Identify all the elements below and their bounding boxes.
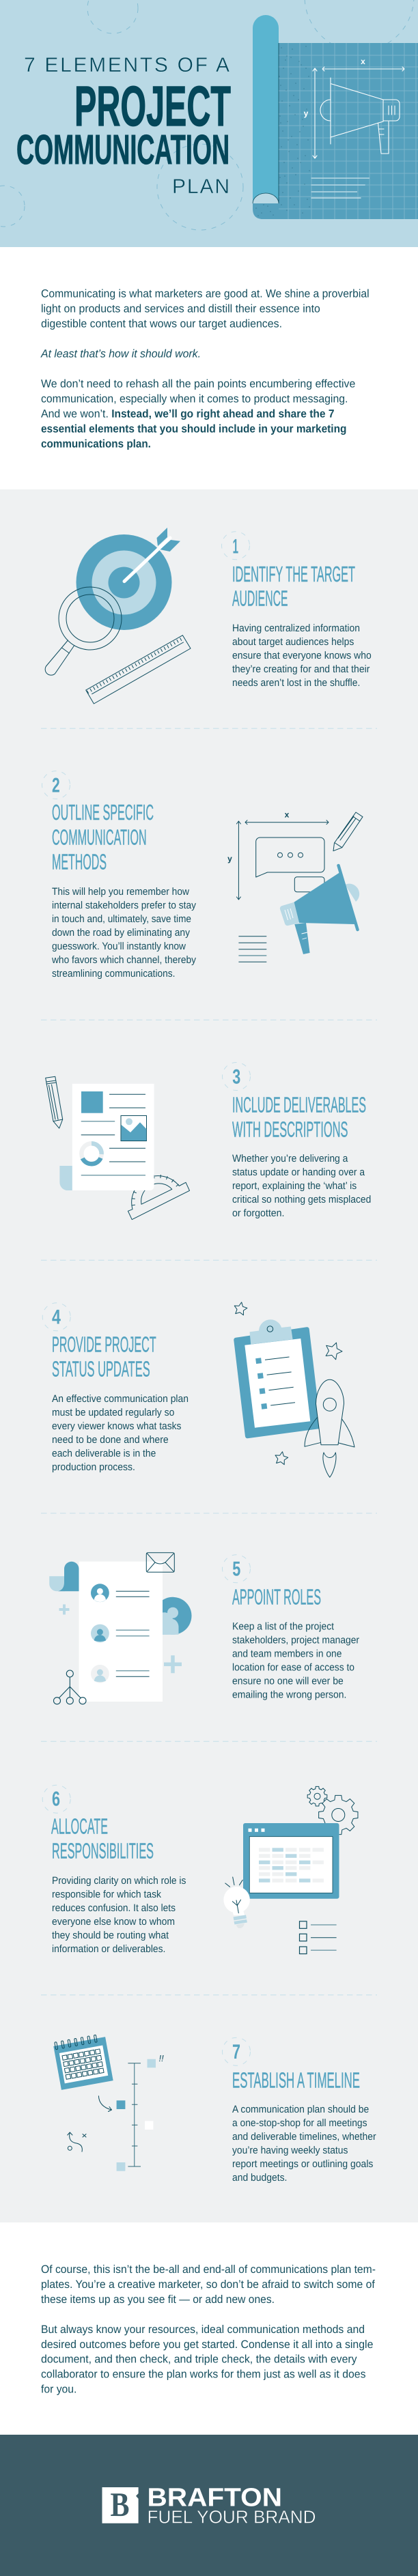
step number 3	[223, 1062, 250, 1091]
closing text block: document, and then check, and triple check, the details with every	[41, 2353, 357, 2366]
body text 6: they should be routing what	[52, 1930, 169, 1941]
title: PLAN	[172, 175, 229, 198]
closing text block: collaborator to ensure the plan works for them just as well as it does	[41, 2369, 366, 2381]
body text 1: they’re creating for and that their	[232, 663, 370, 675]
closing text block: plates. You’re a creative marketer, so don’t be afraid to switch some of	[41, 2278, 375, 2291]
body text 3: status update or handing over a	[232, 1167, 365, 1178]
intro text block: communication, especially when it comes to product messaging.	[41, 392, 348, 405]
brand wordmark: FUEL YOUR BRAND	[148, 2507, 316, 2528]
body text 3: or forgotten.	[232, 1207, 284, 1219]
body text 5: emailing the wrong person.	[232, 1689, 346, 1700]
heading: provide project status updates: PROVIDE PROJECT	[52, 1332, 156, 1356]
panel: element 2	[42, 771, 363, 979]
step number 2	[42, 771, 70, 799]
step number 7	[223, 2037, 250, 2065]
closing text block: desired outcomes before you get started. Condense it all into a single	[41, 2338, 373, 2351]
title: COMMUNICATION	[16, 126, 229, 173]
closing text block: for you.	[41, 2384, 76, 2396]
body text 7: a one-stop-shop for all meetings	[232, 2117, 367, 2129]
body text 7: and deliverable timelines, whether	[232, 2131, 376, 2143]
heading: provide project status updates	[52, 1332, 156, 1381]
icon: team roster document	[49, 1553, 191, 1704]
body text 7: A communication plan should be	[232, 2104, 369, 2115]
body text 2: guesswork. You’ll instantly know	[52, 941, 186, 952]
body text 2: who favors which channel, thereby	[51, 954, 196, 966]
title: 7 ELEMENTS OF A	[24, 54, 229, 76]
icon: clipboard, rocket and stars	[233, 1301, 354, 1477]
body text 4: each deliverable is in the	[52, 1448, 156, 1459]
intro text block: Instead, we’ll go right ahead and share the 7	[111, 407, 334, 420]
step number 6	[42, 1785, 70, 1813]
body text 4: must be updated regularly so	[52, 1407, 174, 1418]
closing text block	[41, 2263, 376, 2396]
body text 1: Having centralized information	[232, 622, 360, 634]
icon: Brafton logo mark: B	[111, 2485, 130, 2523]
body text 4: An effective communication plan	[52, 1393, 189, 1405]
heading: outline specific communication methods	[52, 800, 154, 874]
intro text block: digestible content that wows our target audiences.	[41, 317, 282, 330]
body text 6: everyone else know to whom	[52, 1916, 175, 1928]
body text 7	[232, 2104, 376, 2184]
body text 5	[232, 1620, 359, 1700]
step number 4: 4	[52, 1306, 61, 1328]
body text 5: location for ease of access to	[232, 1661, 354, 1673]
blueprint scroll illustration: x	[361, 57, 365, 66]
body text 4: every viewer knows what tasks	[52, 1420, 181, 1432]
closing text block: these items up as you see fit — or add new ones.	[41, 2293, 275, 2306]
blueprint scroll illustration: y	[304, 109, 309, 118]
body text 7: and budgets.	[232, 2172, 287, 2184]
body text 2: streamlining communications.	[52, 968, 175, 979]
heading: outline specific communication methods: COMMUNICATION	[52, 825, 147, 849]
step number 5: 5	[232, 1558, 240, 1580]
body text 7: report meetings or outlining goals	[232, 2158, 373, 2170]
icon: target with arrow, magnifier and ruler	[45, 528, 191, 704]
body text 4: need to be done and where	[52, 1434, 169, 1446]
panel: footer	[0, 2435, 418, 2576]
icon: gears, schedule window, bulb and checklist	[223, 1786, 358, 1954]
panel: header	[0, 0, 418, 247]
heading: allocate responsibilities: ALLOCATE	[51, 1814, 108, 1839]
intro text block: Communicating is what marketers are good at. We shine a proverbial	[41, 287, 370, 300]
body text 4: production process.	[52, 1461, 135, 1473]
intro text block: At least that’s how it should work.	[40, 347, 201, 360]
body text 2: This will help you remember how	[52, 886, 189, 898]
step number 2: 2	[52, 775, 60, 797]
body text 3: report, explaining the ‘what’ is	[232, 1180, 357, 1192]
icon: speech bubbles, megaphone and pencil	[227, 810, 363, 962]
heading: outline specific communication methods: METHODS	[52, 849, 107, 874]
body text 1: about target audiences helps	[232, 636, 354, 648]
body text 3	[232, 1153, 371, 1219]
body text 2	[51, 886, 196, 979]
panel: element 5	[49, 1553, 359, 1704]
body text 7: you’re having weekly status	[232, 2145, 348, 2156]
panel: element 6	[42, 1785, 358, 1955]
body text 5: and team members in one	[232, 1648, 342, 1659]
title: PROJECT	[74, 74, 231, 138]
body text 5: Keep a list of the project	[232, 1620, 335, 1632]
intro text block: essential elements that you should include in your marketing	[41, 423, 346, 435]
closing text block: But always know your resources, ideal communication methods and	[41, 2323, 365, 2336]
intro text block: And we won’t.	[41, 407, 109, 420]
intro text block: communications plan.	[41, 438, 151, 450]
body text 6: information or deliverables.	[52, 1943, 165, 1955]
heading: identify the target audience: AUDIENCE	[232, 586, 288, 611]
body text 5: ensure no one will ever be	[232, 1675, 344, 1687]
body text 3: Whether you’re delivering a	[232, 1153, 348, 1164]
body text 6: responsible for which task	[52, 1889, 161, 1900]
heading: appoint roles: APPOINT ROLES	[232, 1584, 321, 1609]
body text 2: in touch and, ultimately, save time	[52, 913, 191, 925]
intro text block	[40, 287, 370, 450]
step number 7: 7	[232, 2041, 240, 2063]
heading: outline specific communication methods: OUTLINE SPECIFIC	[52, 800, 154, 825]
heading: allocate responsibilities	[51, 1814, 154, 1863]
body text 6: reduces confusion. It also lets	[52, 1902, 176, 1914]
icon: calendar and timeline: !!	[158, 2053, 164, 2063]
panel: element 3	[46, 1062, 371, 1220]
body text 1	[232, 622, 372, 689]
panel: element 4	[42, 1301, 354, 1477]
intro text block: light on products and services and distill their essence into	[41, 302, 320, 315]
intro text block: We don’t need to rehash all the pain points encumbering effective	[41, 377, 355, 390]
closing text block: Of course, this isn’t the be-all and end-all of communications plan tem-	[41, 2263, 376, 2276]
heading: provide project status updates: STATUS UPDATES	[52, 1356, 150, 1381]
step number 5	[223, 1555, 250, 1583]
icon: Brafton logo mark	[102, 2485, 139, 2523]
step number 6: 6	[52, 1788, 60, 1811]
body text 5: stakeholders, project manager	[232, 1634, 359, 1646]
heading: allocate responsibilities: RESPONSIBILITIES	[52, 1838, 154, 1863]
body text 1: ensure that everyone knows who	[232, 650, 372, 661]
panel: seven elements background	[0, 489, 418, 2222]
icon: speech bubbles, megaphone and pencil: x	[285, 810, 290, 819]
body text 3: critical so nothing gets misplaced	[232, 1194, 371, 1205]
brand wordmark: BRAFTON	[148, 2484, 282, 2513]
body text 6: Providing clarity on which role is	[52, 1875, 186, 1887]
step number 4	[42, 1303, 70, 1331]
body text 4	[52, 1393, 189, 1473]
step number 1: 1	[232, 536, 238, 558]
heading: include deliverables with descriptions	[232, 1092, 366, 1141]
step number 3: 3	[232, 1065, 240, 1088]
body text 2: internal stakeholders prefer to stay	[52, 900, 196, 911]
body text 1: needs aren’t lost in the shuffle.	[232, 677, 360, 689]
icon: document with pencil and protractor	[46, 1076, 190, 1220]
panel: element 7	[53, 2033, 376, 2184]
body text 2: down the road by eliminating any	[52, 927, 190, 939]
blueprint scroll illustration	[253, 15, 418, 219]
title	[16, 54, 231, 198]
step number 1	[221, 532, 250, 560]
brand wordmark	[148, 2484, 316, 2528]
panel: element 1	[45, 528, 372, 704]
icon: calendar and timeline	[53, 2033, 164, 2171]
icon: speech bubbles, megaphone and pencil: y	[227, 854, 232, 863]
body text 6	[52, 1875, 186, 1955]
heading: identify the target audience	[232, 562, 355, 611]
